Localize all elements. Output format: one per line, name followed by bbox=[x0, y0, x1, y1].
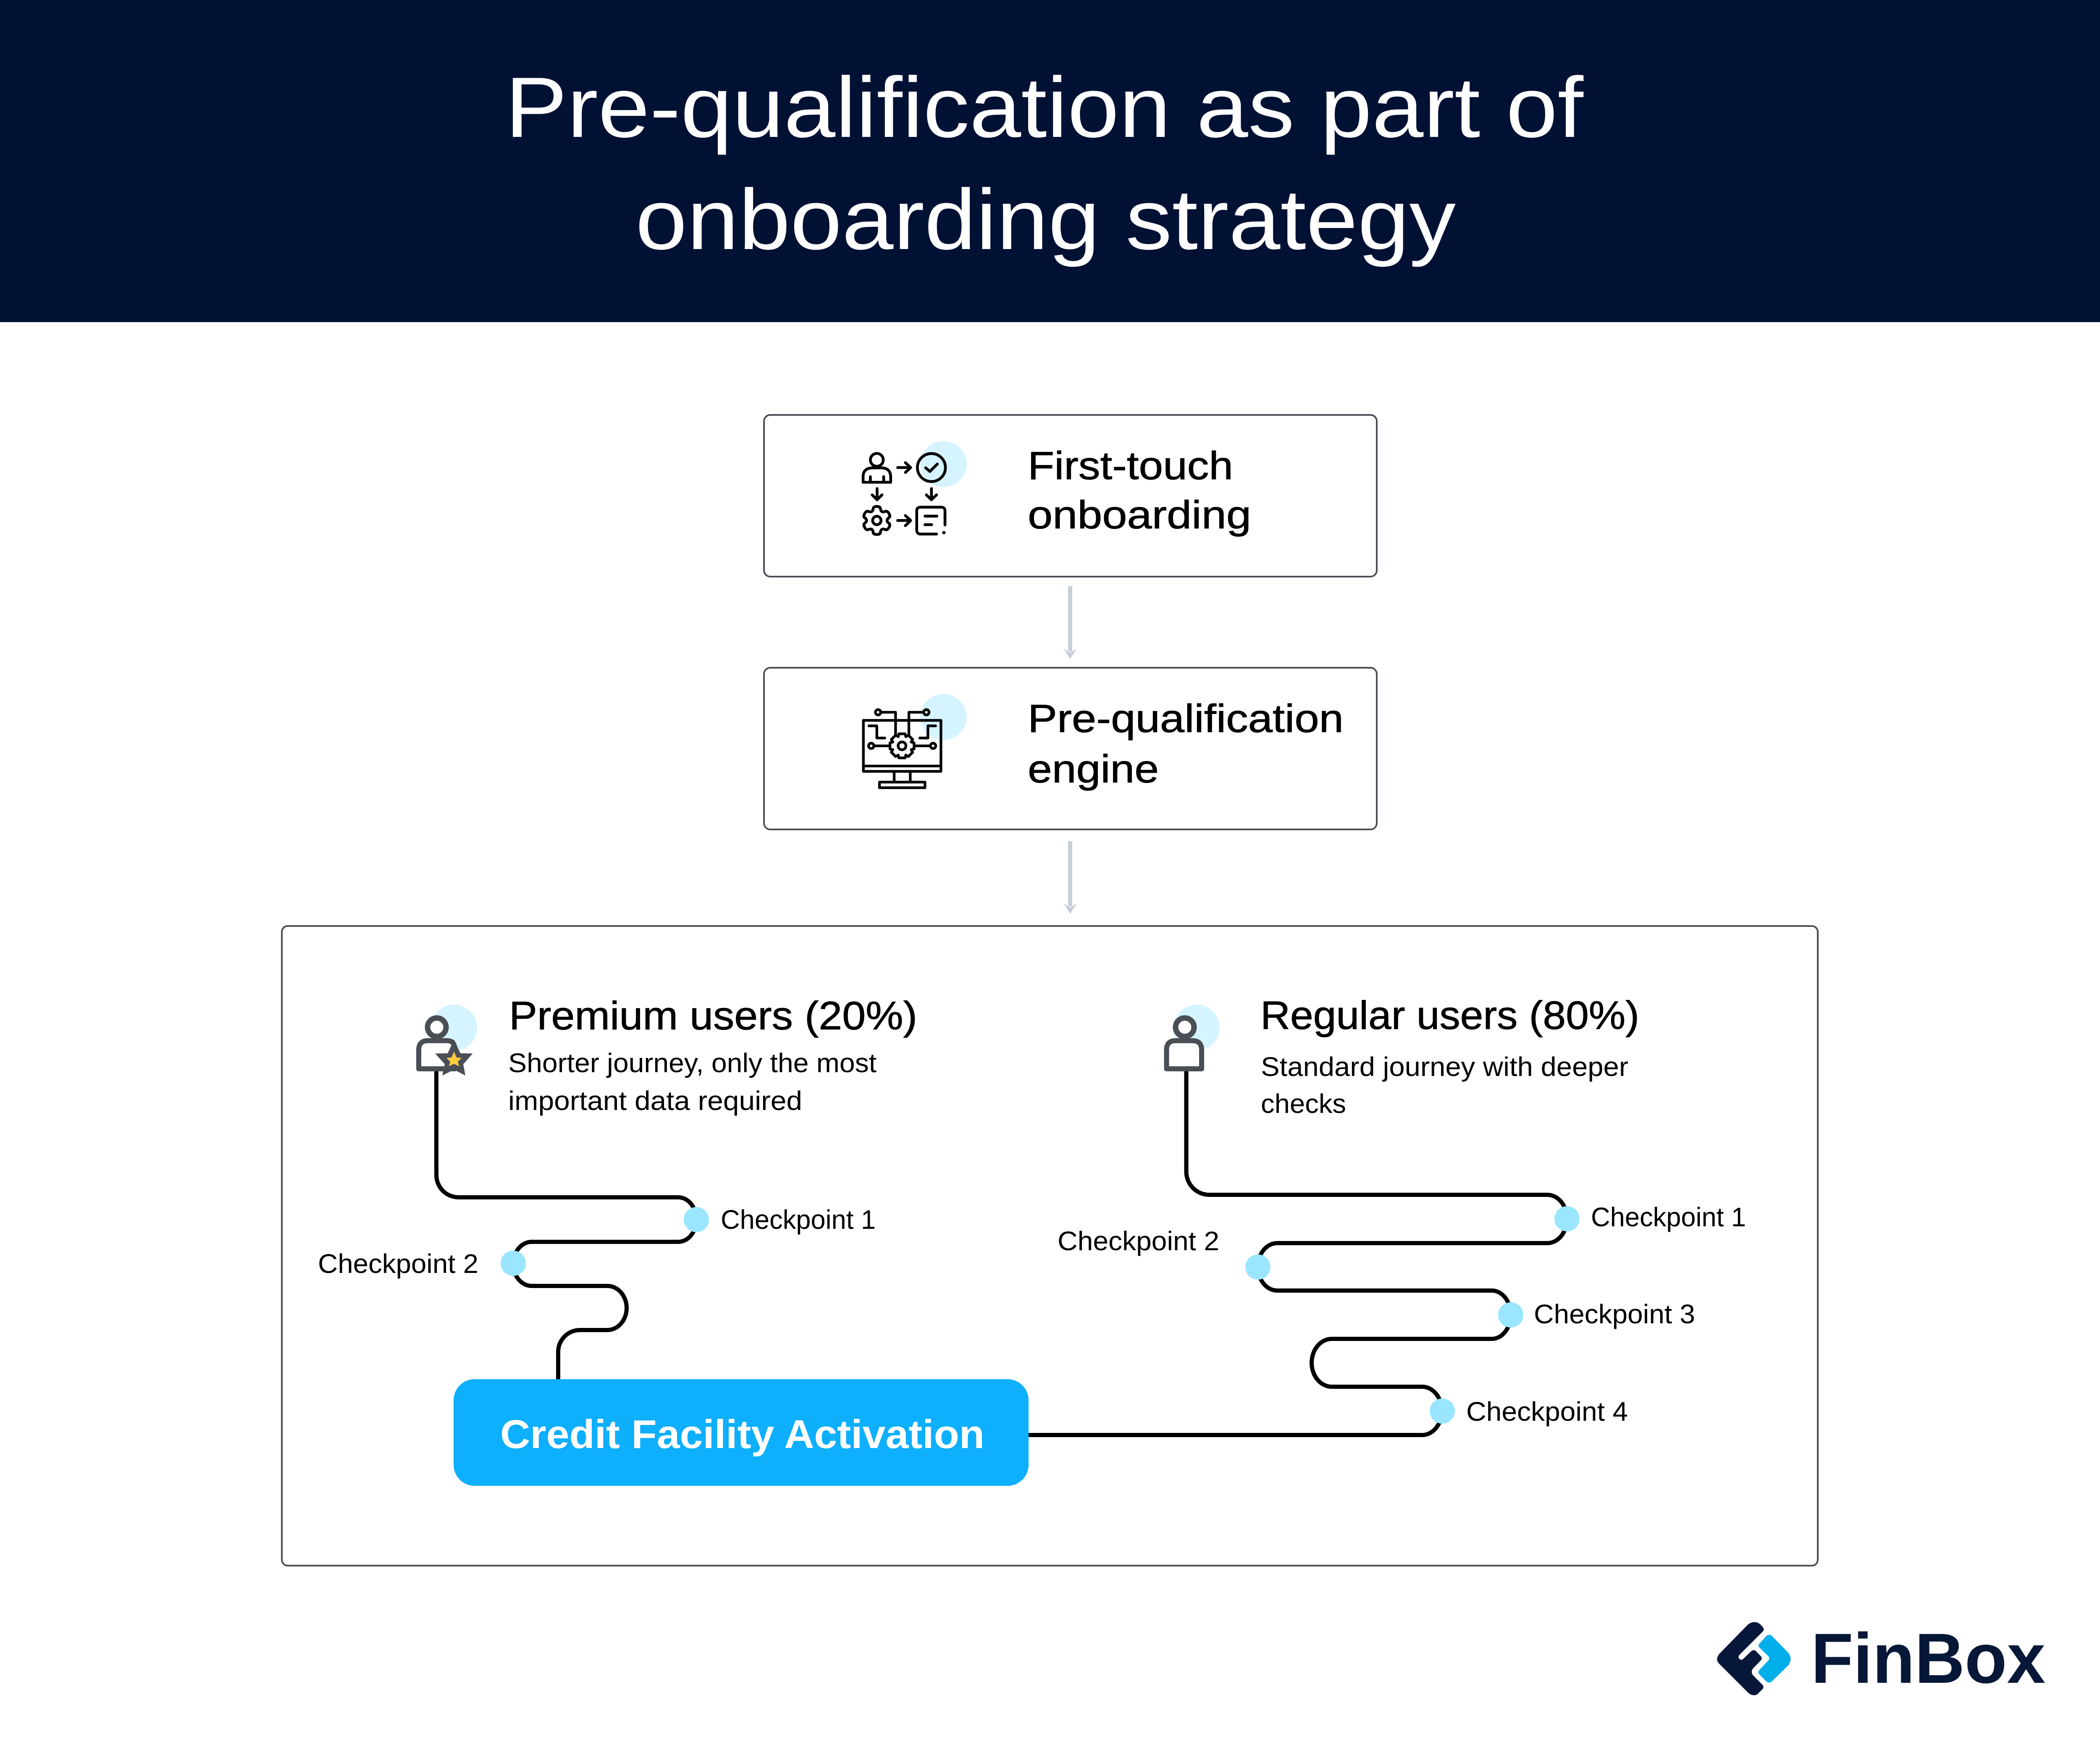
icon: premium user bbox=[419, 1005, 477, 1076]
path: premium journey bbox=[436, 1069, 696, 1382]
checkpoints: premium journey: Checkpoint 1 bbox=[721, 1204, 876, 1235]
logo wordmark: FinBox bbox=[1811, 1619, 2045, 1698]
label: first-touch onboarding: First-touch bbox=[1028, 443, 1233, 488]
text: premium users bbox=[508, 994, 917, 1116]
checkpoints: premium journey: Checkpoint 2 bbox=[318, 1249, 478, 1279]
text: regular users: Standard journey with deeper bbox=[1261, 1052, 1628, 1082]
icon: engine monitor bbox=[864, 694, 967, 788]
text: regular users: checks bbox=[1261, 1089, 1346, 1119]
text: regular users: Regular users (80%) bbox=[1260, 993, 1639, 1038]
button: credit facility activation bbox=[454, 1379, 1029, 1486]
label: pre-qualification engine bbox=[1028, 696, 1344, 791]
text: premium users: important data required bbox=[508, 1086, 802, 1116]
header band with title bbox=[0, 0, 2100, 322]
button: credit facility activation: Credit Facility Activation bbox=[500, 1412, 984, 1457]
text: premium users: Shorter journey, only the most bbox=[508, 1048, 877, 1078]
checkpoints: regular journey bbox=[1058, 1202, 1746, 1427]
checkpoints: regular journey: Checkpoint 4 bbox=[1466, 1396, 1628, 1427]
text: regular users bbox=[1260, 993, 1639, 1119]
arrow: engine to journeys bbox=[1063, 841, 1077, 914]
title: Pre-qualification as part of bbox=[505, 60, 1583, 155]
panel: pre-qualification engine bbox=[764, 668, 1377, 829]
title: onboarding strategy bbox=[635, 172, 1456, 268]
path: regular journey bbox=[1025, 1069, 1567, 1435]
text: premium users: Premium users (20%) bbox=[509, 994, 917, 1038]
label: first-touch onboarding bbox=[1028, 443, 1251, 537]
panel: user journeys bbox=[282, 926, 1818, 1566]
icon: onboarding flow bbox=[862, 441, 967, 535]
arrow: onboarding to engine bbox=[1063, 586, 1077, 659]
checkpoints: regular journey: Checkpoint 2 bbox=[1058, 1226, 1219, 1256]
checkpoints: regular journey: Checkpoint 1 bbox=[1591, 1202, 1746, 1232]
label: first-touch onboarding: onboarding bbox=[1028, 493, 1251, 537]
panel: first-touch onboarding bbox=[764, 415, 1377, 577]
label: pre-qualification engine: Pre-qualification bbox=[1028, 696, 1344, 740]
checkpoints: premium journey bbox=[318, 1204, 876, 1279]
logo: FinBox bbox=[1717, 1619, 2045, 1698]
title bbox=[505, 60, 1583, 268]
checkpoints: regular journey: Checkpoint 3 bbox=[1534, 1299, 1695, 1329]
logo mark bbox=[1717, 1622, 1790, 1695]
label: pre-qualification engine: engine bbox=[1028, 747, 1159, 791]
icon: regular user bbox=[1167, 1005, 1220, 1069]
